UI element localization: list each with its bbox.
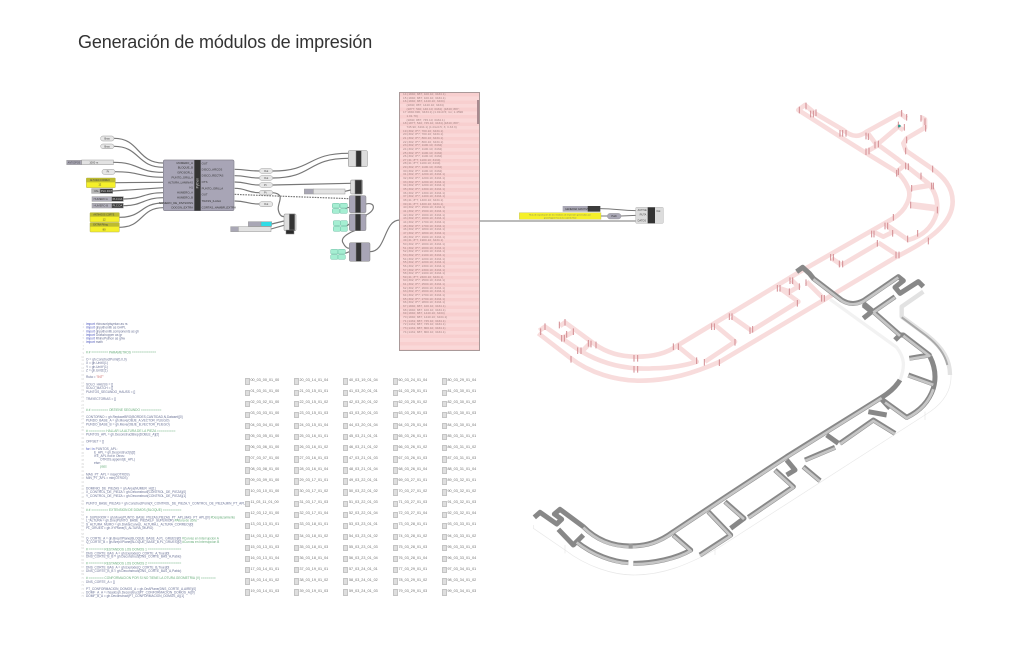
python node: HUMERO_B xyxy=(177,196,193,200)
title: Generación de módulos de impresión xyxy=(78,32,372,52)
text: 05_03_05_01_00 xyxy=(250,434,279,438)
capsule inputs xyxy=(101,136,273,207)
panel: python code listing: # # ========= PARAMETROS ============= xyxy=(86,350,156,354)
sources xyxy=(67,136,345,232)
labels of source params: 1000 m xyxy=(89,160,99,164)
panel: python code listing: import math xyxy=(86,340,103,344)
panel: python code listing: DNS_CORTE_BAS_A = gh.Explode(Q_CORTE_A,True)[0] xyxy=(86,551,169,555)
text: 37_03_19_01_01 xyxy=(300,567,328,571)
text: 53_03_23_01_01 xyxy=(349,522,378,526)
panel: python code listing xyxy=(86,322,245,598)
panel: python code listing: SOLO_HAUSS = [] xyxy=(86,383,113,387)
text: 45_03_21_01_01 xyxy=(349,434,378,438)
panel: output components right of list: RUTA xyxy=(640,214,647,217)
labels of source params: VAL xyxy=(94,189,99,193)
python node: TRASS_ILAGA xyxy=(202,199,221,203)
panel: python code listing: F_SUPERIOR = gh.Move(PUNTO_BASE_PIEZAS,PIEZAS_PT_APL,MAS_PT_APL)[0] #Desplazamiento xyxy=(86,515,235,519)
thin base outline xyxy=(533,375,951,575)
text: 54_03_23_01_02 xyxy=(349,534,378,538)
text: 17_03_14_01_01 xyxy=(250,567,279,571)
text: 81_03_30_01_01 xyxy=(448,389,476,393)
labels of source params: EXTRA Pilling xyxy=(93,224,109,227)
labels of source params: Bras xyxy=(104,136,110,140)
labels of source params: PLC.DAT xyxy=(101,189,112,193)
panel: python code listing: # # ========= OBTIENE SEGUNDO =========== xyxy=(86,408,161,412)
text: 00_03_00_01_00 xyxy=(250,378,279,382)
panel: pink data list: 14 {1840; 887; 100.10; 3434.1} 15 {1840; 887; 100.10; 3434.1} 16 {1840; 887; 1440.10; 3434} {1840; 887; 1440.10; 3434} {1877; 540; 140.10; 3434} {1840; 887; 17 1840.990, 3434.1} {1.01x0.5; 'on; 1.4590 1.01.70} {1840; 887; 745.10; 3434.1} 18 {1877; 540; 745.10; 3434} {1840; 887; 745.90; 3434.1} {1.01x0.5; 3; 3.33.3} 19 {302; 8*7; 700.10; 3434.1} 20 {302; 8*7; 700.10; 3434.1} 21 {302; 8*7; 800.10; 3434.1} 22 {302; 8*7; 800.10; 3434.1} 23 {302; 8*7; 1100.10; 3434} 24 {302; 8*7; 1100.10; 3434} 25 {302; 8*7; 1100.10; 3434} 26 {302; 8*7; 1100.10; 3434} 27 {41; 8*7; 1100.10; 3434} 28 {41; 8*7; 1100.10; 3434} 29 {302; 8*7; 1100.10; 3434} 30 {302; 8*7; 1100.10; 3434} 31 {302; 8*7; 1200.10; 3434.1} 32 {302; 8*7; 1200.10; 3434.1} 33 {302; 8*7; 1200.10; 3434.1} 34 {302; 8*7; 1200.10; 3434.1} 35 {302; 8*7; 1300.10; 3434.1} 36 {302; 8*7; 1300.10; 3434.1} 37 {302; 8*7; 1400.10; 3434.1} 38 {41; 8*7; 1400.10; 3434.1} 39 {41; 8*7; 1400.10; 3434.1} 40 {302; 8*7; 1500.10; 3434.1} 41 {302; 8*7; 1500.10; 3434.1} 42 {302; 8*7; 1600.10; 3434.1} 43 {302; 8*7; 1600.10; 3434.1} 44 {302; 8*7; 1700.10; 3434.1} 45 {302; 8*7; 1700.10; 3434.1} 46 {302; 8*7; 1800.10; 3434.1} 47 {302; 8*7; 1800.10; 3434.1} 48 {302; 8*7; 1900.10; 3434.1} 49 {41; 8*7; 1900.10; 3434.1} 50 {302; 8*7; 2000.10; 3434.1} 51 {302; 8*7; 2000.10; 3434.1} 52 {302; 8*7; 2100.10; 3434.1} 53 {302; 8*7; 2100.10; 3434.1} 54 {302; 8*7; 2200.10; 3434.1} 55 {302; 8*7; 2200.10; 3434.1} 56 {302; 8*7; 2300.10; 3434.1} 57 {302; 8*7; 2300.10; 3434.1} 58 {302; 8*7; 2400.10; 3434.1} 59 {41; 8*7; 2400.10; 3434.1} 60 {302; 8*7; 2500.10; 3434.1} 61 {302; 8*7; 2500.10; 3434.1} 62 {302; 8*7; 2600.10; 3434.1} 63 {302; 8*7; 2600.10; 3434.1} 64 {302; 8*7; 2700.10; 3434.1} 65 {302; 8*7; 2700.10; 3434.1} 66 {302; 8*7; 2800.10; 3434.1} 67 {1840; 887; 100.10; 3434.1} 68 {1840; 887; 100.10; 3434.1} 69 {1840; 887; 1440.10; 3434} 70 {1840; 887; 1440.10; 3434.1} 71 {1431; 887; 745.10; 3434.1} 72 {1431; 887; 745.10; 3434.1} 73 {1431; 887; 800.10; 3434.1} 74 {1431; 887; 800.10; 3434.1} xyxy=(403,93,463,334)
labels of source params: ANTIHGOS CORTE xyxy=(93,214,115,217)
text: 04_03_04_01_00 xyxy=(250,423,279,427)
panel: python code listing: O = gh.ConstructPoint(0,0,0) xyxy=(86,358,127,362)
text: 29_03_17_01_01 xyxy=(300,478,328,482)
text: 32_03_17_01_04 xyxy=(300,511,328,515)
text: 48_03_21_01_04 xyxy=(349,467,378,471)
text: 58_03_24_01_02 xyxy=(349,578,378,582)
text: 23_03_15_01_03 xyxy=(300,411,328,415)
text: 68_03_26_01_04 xyxy=(398,467,427,471)
text: 02_03_02_01_00 xyxy=(250,400,279,404)
python node: DISCO_ARCOS xyxy=(202,167,222,171)
text: 99_03_34_01_03 xyxy=(448,589,476,593)
sliders xyxy=(67,160,345,232)
text: 24_03_15_01_04 xyxy=(300,423,328,427)
text: 69_03_27_01_01 xyxy=(398,478,427,482)
panel: python code listing: else: xyxy=(94,461,101,465)
python node: HUMERO_A xyxy=(177,191,193,195)
text: 88_03_31_01_04 xyxy=(448,467,476,471)
text: 90_03_32_01_02 xyxy=(448,489,476,493)
panel: output components right of list: Path xyxy=(611,214,617,218)
text: 36_03_18_01_04 xyxy=(300,556,328,560)
text: 28_03_16_01_04 xyxy=(300,467,328,471)
text: 78_03_29_01_02 xyxy=(398,578,427,582)
text: 95_03_33_01_03 xyxy=(448,545,476,549)
text: 47_03_21_01_03 xyxy=(349,456,378,460)
text: 67_03_26_01_03 xyxy=(398,456,427,460)
labels of source params: 12 xyxy=(98,183,102,187)
text: 93_03_33_01_01 xyxy=(448,522,476,526)
panel: python code listing: Y_CONTROL_DE_PIEZA = gh.Deconstruct(CONTROL_DE_PIEZA)[1] xyxy=(86,494,186,498)
panel: python code listing: # ======== CONFORMACION POR SI NO TIENE LA OTURA GEOMETRIA (V) ======== xyxy=(86,576,216,580)
labels of source params: ALTURA CORREO xyxy=(90,179,110,182)
text: 92_03_32_01_04 xyxy=(448,511,476,515)
panel: python code listing: X_CONTROL_DE_PIEZA = gh.Deconstruct(CONTROL_DE_PIEZA)[0] xyxy=(86,490,186,494)
panel: output components right of list: DATOS xyxy=(638,219,646,222)
panel: python code listing: PUNDO_BASE_B = gh.Move(OBJE_B,VECTOR_PLIEGO) xyxy=(86,422,170,426)
panel: python code listing: # ======== RESTANDOS LOS DOMOS 2 ================== xyxy=(86,562,181,566)
text: 57_03_24_01_01 xyxy=(349,567,378,571)
panel: output components right of list: grasshopper hacia la carpeta final xyxy=(544,216,577,219)
text: 97_03_34_01_01 xyxy=(448,567,476,571)
panel: python code listing: Z = gh.UnitZ(1) xyxy=(86,368,108,372)
pink walls xyxy=(538,105,953,381)
panel: python code listing: PUNTO_BASE_PIEZAS = gh.ConstructPoint(X_CONTROL_DE_PIEZA,Y_CONTROL_DE_PIEZA,MIN_PT_APL) xyxy=(86,501,245,505)
panel: python code listing: DNS_CORTE_B_B = gh.Deconstruct(DNS_CORTE_BAS_A,Pablo) xyxy=(86,569,181,573)
panel: python code listing: DOMINIO_DE_PIEZAS = gh.Area(NUMER_H)[1] xyxy=(86,487,156,491)
text: 42_03_20_01_02 xyxy=(349,400,378,404)
yellow panels xyxy=(86,178,119,232)
panel: python code listing: # ========= HALLAR LA ALTURA DE LA PIEZA ========== xyxy=(86,429,176,433)
panel: python code listing: # # ========= EXTENSION DE DOMOS (BLOQUE) ========== xyxy=(86,508,182,512)
text: 76_03_28_01_04 xyxy=(398,556,427,560)
text: 89_03_32_01_01 xyxy=(448,478,476,482)
panel: python code listing: OFFSET = [] xyxy=(86,440,104,444)
text: 71_03_27_01_03 xyxy=(398,500,427,504)
labels of source params: 80 xyxy=(103,227,106,231)
panel: python code listing: import RhinoPython as ghw xyxy=(86,337,126,341)
python node: NUMERO_DE_DIVISIONS xyxy=(159,201,193,205)
python node: ALTURA_LAMINAS xyxy=(168,180,193,184)
text: 11_03_11_01_00 xyxy=(250,500,279,504)
text: 35_03_18_01_03 xyxy=(300,545,328,549)
panel: pink axonometric model xyxy=(537,102,955,383)
text: 85_03_31_01_01 xyxy=(448,434,476,438)
python node: OUT xyxy=(202,192,208,196)
lighter wall faces xyxy=(577,278,933,564)
panel: file list xyxy=(245,378,476,596)
text: 94_03_33_01_02 xyxy=(448,534,476,538)
panel: python code listing: CONTORNO = gh.ReplaceBRO(BORDES,CANTIDAD,N,Dataset)[0] xyxy=(86,415,183,419)
labels of source params: PLC.DA xyxy=(113,204,122,208)
text: 01_03_01_01_00 xyxy=(250,389,279,393)
panel: python code listing: PUNTOS_APL = gh.DeconstructBrep(DOBLE_A)[2] xyxy=(86,432,159,436)
python node: OUT xyxy=(202,161,208,165)
panel: python code listing: MAS_PT_APL = max(OTROS) xyxy=(86,472,130,476)
text: 06_03_06_01_00 xyxy=(250,445,279,449)
wires xyxy=(113,138,400,253)
panel: python code listing: import Grasshopper as gr xyxy=(86,333,123,337)
top right components xyxy=(284,151,370,261)
panel: python code listing: E_APL = gh.Deconstruct(i)[2] xyxy=(94,450,135,454)
text: 62_03_25_01_02 xyxy=(398,400,427,404)
text: 38_03_19_01_02 xyxy=(300,578,328,582)
labels of source params: Pt xyxy=(107,170,109,174)
python node: Python xyxy=(196,178,200,188)
text: 61_03_25_01_01 xyxy=(398,389,427,393)
text: 33_03_18_01_01 xyxy=(300,522,328,526)
text: 22_03_15_01_02 xyxy=(300,400,328,404)
text: 77_03_29_01_01 xyxy=(398,567,427,571)
gray and dark params xyxy=(92,189,123,208)
red joint ticks xyxy=(541,103,937,373)
panel: python code listing: Y = gh.UnitY(1) xyxy=(86,365,108,369)
panel: python code listing: Q_CORTE_B = gh.BrepXPlane(BLOQUE_BASE_B,PL_GRUES)[0] #Curvas en Interrupcion B xyxy=(86,540,219,544)
text: 74_03_28_01_02 xyxy=(398,534,427,538)
python node: DISCO_RECTAS xyxy=(202,174,224,178)
python node: MUMERO_H xyxy=(176,161,193,165)
panel: output components right of list: Out xyxy=(656,210,661,213)
text: 25_03_16_01_01 xyxy=(300,434,328,438)
panel: output components right of list: ACTIVE xyxy=(638,209,647,212)
text: 59_03_24_01_03 xyxy=(349,589,378,593)
labels of source params: ANTICIPOS xyxy=(68,161,81,164)
panel: python code listing: pass xyxy=(100,464,107,468)
column stub xyxy=(629,544,633,549)
text: 20_03_14_01_04 xyxy=(300,378,328,382)
panel: python code listing: PL_GRUES = gh.XYPlane(S_ALTURA_MURO) xyxy=(86,526,153,530)
text: 16_03_13_01_04 xyxy=(250,556,279,560)
python node: OTS xyxy=(202,180,208,184)
text: 83_03_30_01_03 xyxy=(448,411,476,415)
panel: python code listing: X = gh.UnitX(1) xyxy=(86,361,108,365)
python node: PUNTO_GRILLA xyxy=(202,186,223,190)
text: 18_03_14_01_02 xyxy=(250,578,279,582)
text: 44_03_20_01_04 xyxy=(349,423,378,427)
text: 30_03_17_01_02 xyxy=(300,489,328,493)
text: 91_03_32_01_03 xyxy=(448,500,476,504)
labels of source params: Out xyxy=(264,176,269,180)
panel: python code listing: MIN_PT_APL = min(OTROS) xyxy=(86,476,128,480)
panel: python code listing: DNS_CORTE_A = [] xyxy=(86,580,115,584)
panel: python code listing: DOMF_A_A = rhsadd.gh.Deconstruct(PT_CONFORMACION_DOMOS_A)[0] xyxy=(86,591,195,595)
text: 86_03_31_01_02 xyxy=(448,445,476,449)
panel: python code listing: If E_APL not in Otros: xyxy=(94,454,125,458)
text: 55_03_23_01_03 xyxy=(349,545,378,549)
text: 10_03_10_01_00 xyxy=(250,489,279,493)
text: 84_03_30_01_04 xyxy=(448,423,476,427)
panel: gray axonometric model xyxy=(532,264,952,576)
text: 41_03_20_01_01 xyxy=(349,389,378,393)
labels of source params: Pt xyxy=(264,183,267,187)
python node: DOGON_EXTRA xyxy=(171,206,193,210)
text: 43_03_20_01_03 xyxy=(349,411,378,415)
panel: python code listing: DNS_CORTE_BAS_A = gh.Explode(Q_CORTE_B,True)[0] xyxy=(86,565,169,569)
text: 70_03_27_01_02 xyxy=(398,489,427,493)
panel: python code listing: DOMF_B_A = gh.Deconstruct(PT_CONFORMACION_DOMOS_A)[1] xyxy=(86,594,184,598)
dark wall tops xyxy=(534,267,935,563)
text: 03_03_03_01_00 xyxy=(250,411,279,415)
text: 87_03_31_01_03 xyxy=(448,456,476,460)
labels of source params: HUMERO A xyxy=(94,197,108,201)
labels of source params: HUMERO B xyxy=(94,204,108,208)
text: 96_03_33_01_04 xyxy=(448,556,476,560)
panel: python code listing: # ======== RESTANDOS LOS DOMOS 1 ================== xyxy=(86,547,181,551)
teal marker xyxy=(898,125,901,127)
text: 82_03_30_01_02 xyxy=(448,400,476,404)
text: 52_03_22_01_04 xyxy=(349,511,378,515)
text: 66_03_26_01_02 xyxy=(398,445,427,449)
text: 50_03_22_01_02 xyxy=(349,489,378,493)
text: 40_03_19_01_04 xyxy=(349,378,378,382)
text: 72_03_27_01_04 xyxy=(398,511,427,515)
text: 75_03_28_01_03 xyxy=(398,545,427,549)
panel: python code listing: PUNTOS_SEGUNDO_HAUSS = [] xyxy=(86,390,135,394)
pale outer walls xyxy=(830,292,950,380)
panel: python code listing: OTROS.append(E_APL) xyxy=(100,457,135,461)
labels of source params: Pt xyxy=(264,191,267,195)
text: 34_03_18_01_02 xyxy=(300,534,328,538)
panel: python code listing: DNS_CORTE_B_B = gh.Deconstruct(DNS_CORTE_BAS_A,Pablo) xyxy=(86,555,181,559)
panel: output components right of list xyxy=(480,206,664,224)
labels of source params: Out xyxy=(264,202,269,206)
text: 39_03_19_01_03 xyxy=(300,589,328,593)
text: 07_03_07_01_00 xyxy=(250,456,279,460)
text: 14_03_13_01_02 xyxy=(250,534,279,538)
panel: python code listing: TRAYECTORIAS = [] xyxy=(86,397,116,401)
text: 65_03_26_01_01 xyxy=(398,434,427,438)
panel: python code listing: Ruta = "INT" xyxy=(86,375,104,379)
text: 12_03_12_01_00 xyxy=(250,511,279,515)
panel: python code listing: PUNDO_BASE_A = gh.Move(OBJE_A,VECTOR_PLIEGO) xyxy=(86,419,169,423)
text: 64_03_25_01_04 xyxy=(398,423,427,427)
text: 46_03_21_01_02 xyxy=(349,445,378,449)
panel: python code listing: import ghpythonlib.components as gh xyxy=(86,329,139,333)
text: 60_03_24_01_04 xyxy=(398,378,427,382)
text: 27_03_16_01_03 xyxy=(300,456,328,460)
panel: python code listing: import rhinoscriptsyntax as rs xyxy=(86,322,128,326)
text: 51_03_22_01_03 xyxy=(349,500,378,504)
labels of source params: 12 xyxy=(103,217,106,221)
labels of source params: PLC.DA xyxy=(113,197,122,201)
text: 09_03_09_01_00 xyxy=(250,478,279,482)
panel: code line numbers: 1 2 3 4 5 6 7 8 9 10 11 12 13 14 15 16 17 18 19 20 21 22 23 24 25 26 27 28 29 30 31 32 33 34 35 36 37 38 39 40 41 42 43 44 45 46 47 48 49 50 51 52 53 54 55 56 57 58 59 60 61 62 63 64 65 66 67 68 69 70 71 72 73 74 75 xyxy=(81,322,84,598)
text: 31_03_17_01_03 xyxy=(300,500,328,504)
panel: output components right of list: GENERAR ARCHIVO xyxy=(565,208,589,211)
text: 73_03_28_01_01 xyxy=(398,522,427,526)
text: 56_03_23_01_04 xyxy=(349,556,378,560)
text: 15_03_13_01_03 xyxy=(250,545,279,549)
python node: H1 xyxy=(189,186,193,190)
text: 21_03_15_01_01 xyxy=(300,389,328,393)
text: 49_03_22_01_01 xyxy=(349,478,378,482)
text: 13_03_13_01_01 xyxy=(250,522,279,526)
labels of source params: Bras xyxy=(104,144,110,148)
labels of source params xyxy=(68,136,269,231)
text: 26_03_16_01_02 xyxy=(300,445,328,449)
text: 79_03_29_01_03 xyxy=(398,589,427,593)
python node: GROSOR_L xyxy=(177,170,193,174)
python node: PUNTO_GRILLA xyxy=(172,175,193,179)
panel: output components right of list: Ruta de exportación de los módulos de impresión generados por xyxy=(529,214,591,217)
text: 63_03_25_01_03 xyxy=(398,411,427,415)
text: 98_03_34_01_02 xyxy=(448,578,476,582)
panel: python code listing: SOLO_MATCH = [] xyxy=(86,386,113,390)
python node: CORTAS_HAMBR_EXTRA xyxy=(202,205,236,209)
panel: python code listing: Q_CORTE_A = gh.BrepXPlane(BLOQUE_BASE_A,PL_GRUES)[0] #Curvas en Interrupcion A xyxy=(86,537,220,541)
panel: python code listing: PT_CONFORMACION_DOMOS_A = gh.OnAPlane(DNS_CORTE_A,AIRE)[0] xyxy=(86,587,196,591)
python node xyxy=(159,160,236,211)
panel: grasshopper node diagram xyxy=(66,136,399,262)
text: 80_03_29_01_04 xyxy=(448,378,476,382)
text: 19_03_14_01_03 xyxy=(250,589,279,593)
panel: python code listing: L_ALTURA = gh.Line(PUNTO_BASE_PIEZAS,F_SUPERIOR) #Altura de corte xyxy=(86,519,197,523)
panel: python code listing: import ghpythonlib as GHPL xyxy=(86,326,126,330)
labels of source params: Out xyxy=(264,169,269,173)
panel: python code listing: for i in PUNTOS_APL: xyxy=(86,447,118,451)
panel: python code listing: S_ALTURA_MURO = gh.DivideCurve(L_ALTURA,L_ALTURA_CORREO)[0] xyxy=(86,522,193,526)
python node: BLOQUE_B xyxy=(178,165,193,169)
mint panels xyxy=(331,203,347,259)
text: 08_03_08_01_00 xyxy=(250,467,279,471)
